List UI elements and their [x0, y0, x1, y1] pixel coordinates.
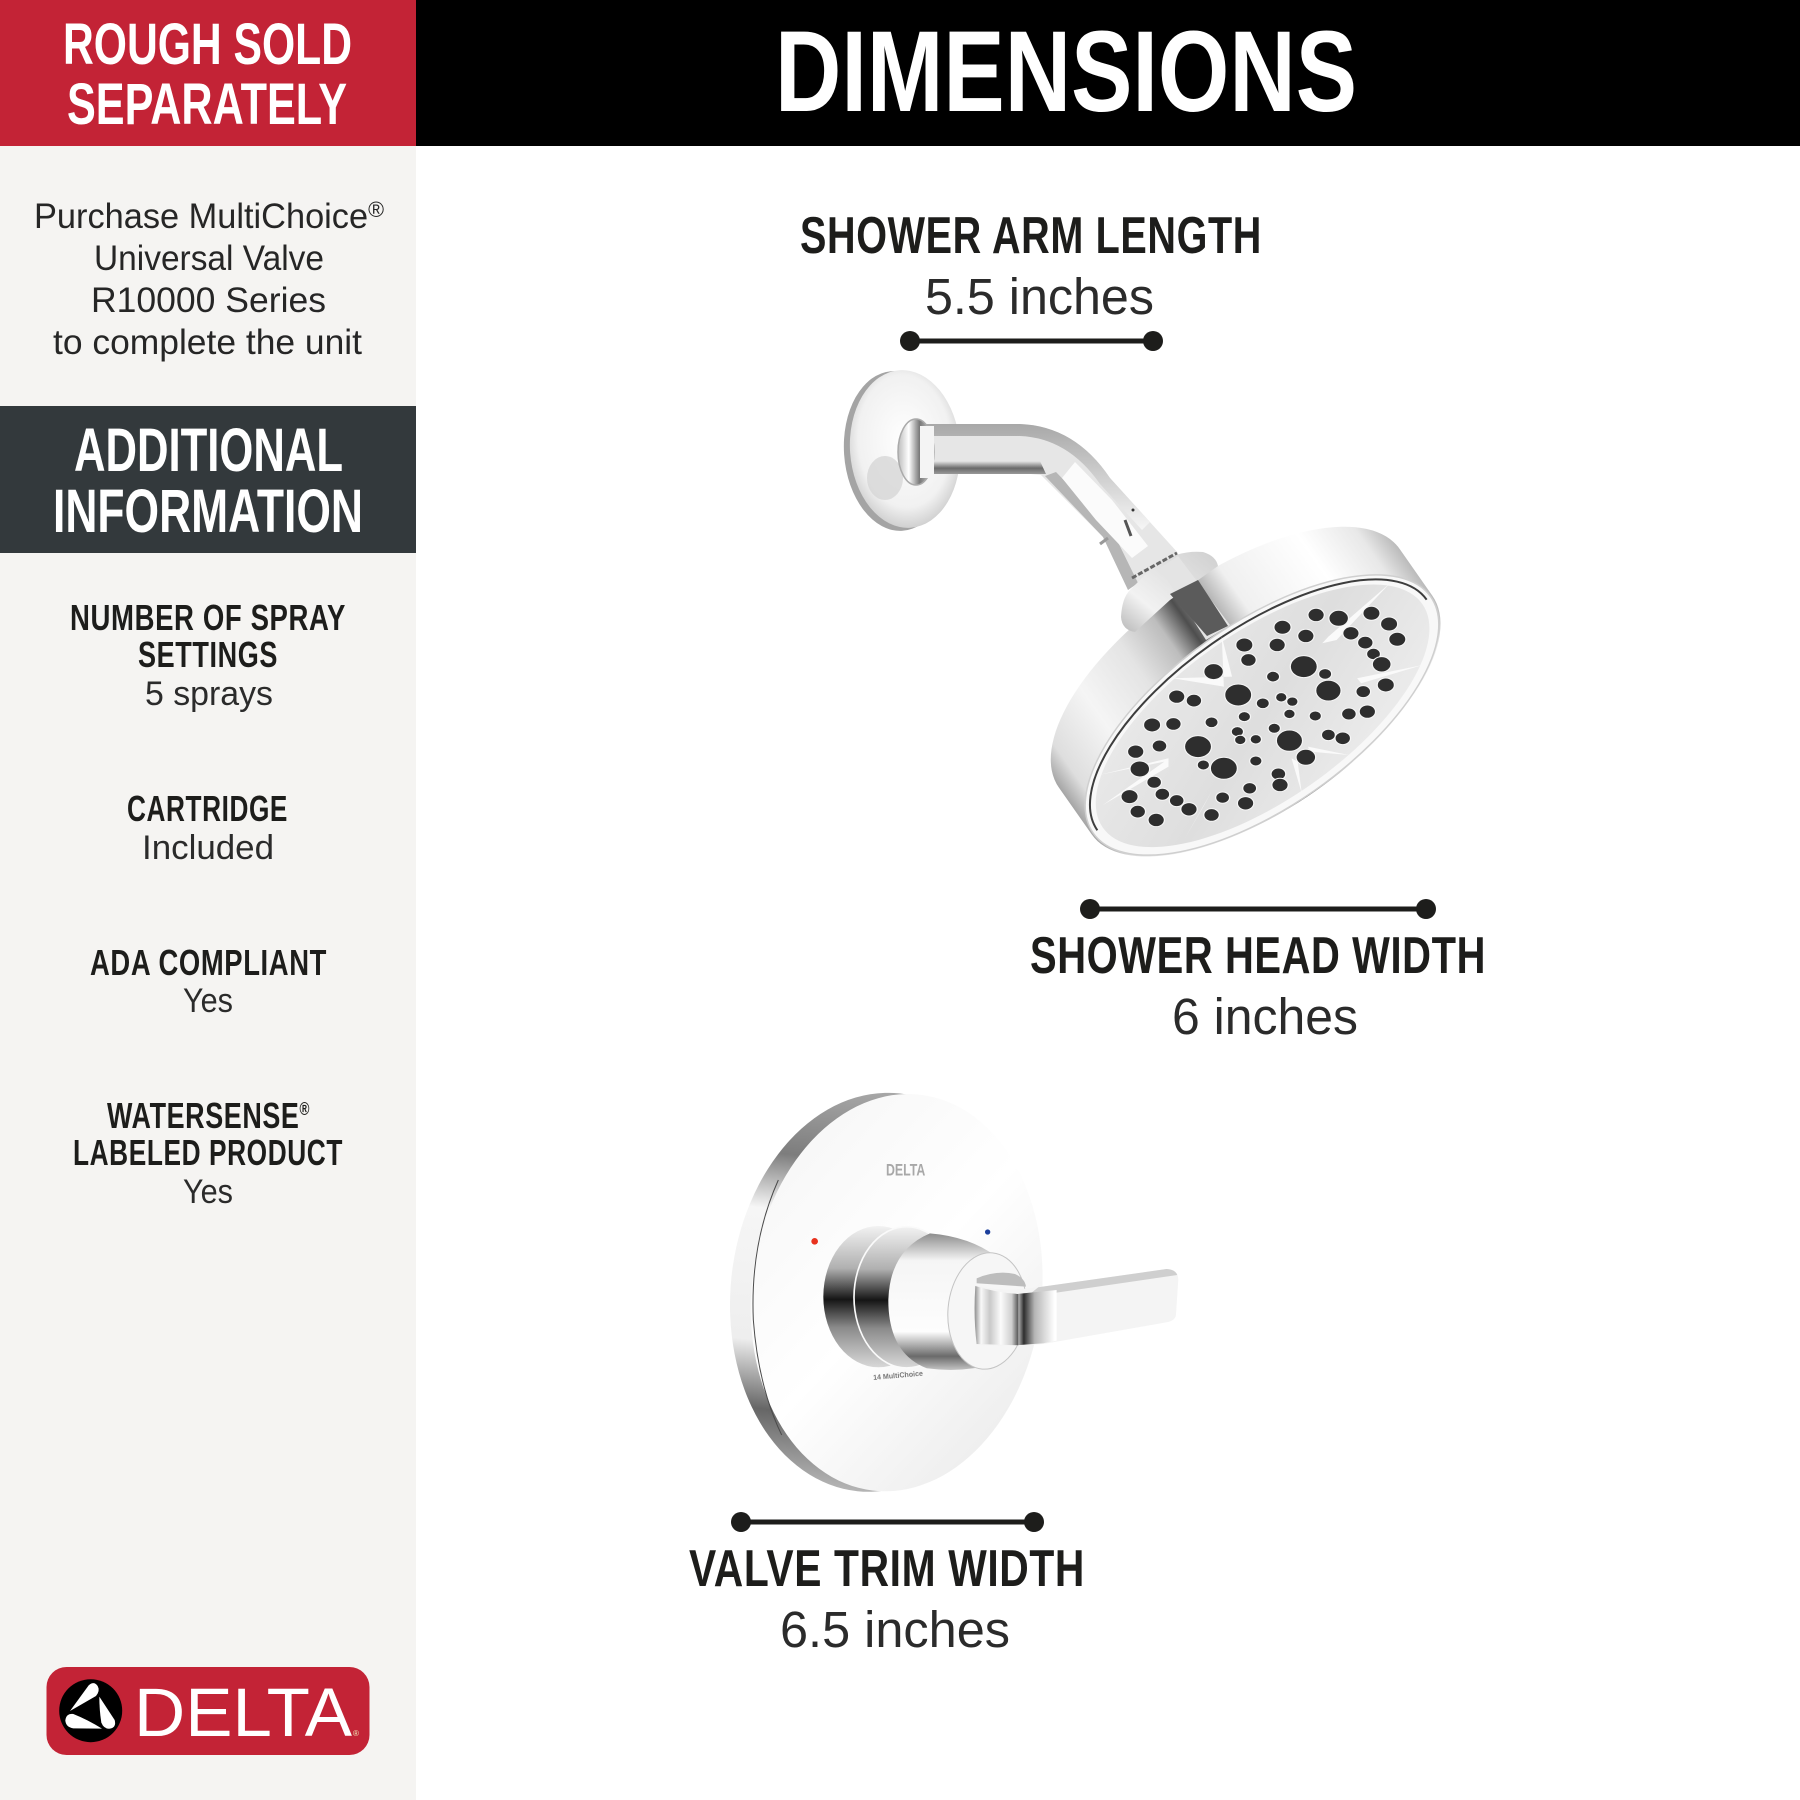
- hub base: [823, 1226, 933, 1367]
- logo: delta: DELTA: [134, 1674, 352, 1751]
- label: shower head width: 6 inches: [1172, 988, 1358, 1045]
- label: shower head width: SHOWER HEAD WIDTH: [1030, 927, 1486, 985]
- text block: purchase note: ®: [368, 197, 384, 222]
- label: shower arm length: [800, 207, 1262, 325]
- text block: purchase note: Universal Valve: [94, 239, 324, 278]
- dimension line: shower arm: [900, 331, 1163, 351]
- logo: delta: ®: [353, 1729, 359, 1738]
- head body: [1006, 473, 1486, 910]
- handle lever: [975, 1269, 1178, 1346]
- hub cone: [888, 1233, 997, 1370]
- plate logo text: DELTA: [886, 1161, 925, 1180]
- handle lever top bevel: [1027, 1269, 1177, 1297]
- spec: number of spray settings: [70, 597, 346, 713]
- spec: cartridge: [127, 788, 288, 867]
- plate small text: 14 MultiChoice: [873, 1369, 923, 1382]
- shower arm: [898, 419, 1178, 590]
- handle neck: [975, 1286, 1018, 1345]
- plate edge line: [753, 1180, 782, 1435]
- text block: purchase note: R10000 Series: [91, 281, 326, 320]
- hub cap recess: [977, 1273, 1026, 1287]
- spec: ada compliant: ADA COMPLIANT: [90, 942, 327, 983]
- text block: purchase note: [34, 197, 384, 362]
- hub cap: [943, 1249, 1032, 1373]
- plate face: [728, 1077, 1065, 1508]
- label: valve trim width: [689, 1540, 1085, 1658]
- panel: sidebar background: [0, 146, 416, 1800]
- heading: rough sold separately: ROUGH SOLD: [63, 12, 352, 77]
- spec: watersense labeled product: Yes: [183, 1173, 233, 1211]
- spec: number of spray settings: 5 sprays: [145, 675, 273, 713]
- label: shower arm length: SHOWER ARM LENGTH: [800, 207, 1262, 265]
- label: shower arm length: 5.5 inches: [925, 268, 1154, 325]
- logo: delta: [46, 1667, 370, 1755]
- panel: rough sold separately: [0, 0, 416, 146]
- illustration: shower head and arm: [839, 366, 1486, 910]
- spec: ada compliant: [90, 942, 327, 1020]
- handle dark reflection: [1017, 1290, 1057, 1345]
- spec: number of spray settings: SETTINGS: [138, 634, 278, 675]
- spec: watersense labeled product: ®: [299, 1099, 310, 1119]
- label: valve trim width: 6.5 inches: [780, 1601, 1010, 1658]
- hub ring: [854, 1227, 959, 1368]
- panel: additional information heading: ADDITIONAL: [74, 416, 343, 484]
- hot marker: [811, 1238, 818, 1245]
- spec: ada compliant: Yes: [183, 982, 233, 1020]
- dimension line: shower head: [1080, 899, 1436, 919]
- head cup and neck: [1121, 552, 1230, 640]
- head face: [1040, 521, 1484, 909]
- cold marker: [985, 1229, 990, 1235]
- title: DIMENSIONS: [775, 8, 1357, 136]
- text block: purchase note: to complete the unit: [53, 323, 362, 362]
- spec: watersense labeled product: WATERSENSE: [107, 1095, 364, 1136]
- panel: additional information heading: [0, 406, 416, 553]
- spec: cartridge: Included: [142, 829, 274, 867]
- label: shower head width: [1030, 927, 1486, 1045]
- spec: watersense labeled product: LABELED PRODUCT: [73, 1132, 343, 1173]
- panel: additional information heading: INFORMATION: [53, 477, 363, 545]
- label: valve trim width: VALVE TRIM WIDTH: [689, 1540, 1085, 1598]
- spec: number of spray settings: NUMBER OF SPRAY: [70, 597, 346, 638]
- flange: [839, 366, 965, 535]
- spec: cartridge: CARTRIDGE: [127, 788, 288, 829]
- illustration: valve trim: [711, 1077, 1178, 1508]
- text block: purchase note: Purchase MultiChoice: [34, 197, 374, 236]
- plate rim: [711, 1078, 1046, 1507]
- heading: rough sold separately: SEPARATELY: [67, 72, 347, 137]
- spray holes: [1099, 583, 1423, 838]
- dimension line: valve trim: [731, 1512, 1044, 1532]
- spec: watersense labeled product: [73, 1095, 343, 1211]
- header: dimensions banner: [416, 0, 1800, 146]
